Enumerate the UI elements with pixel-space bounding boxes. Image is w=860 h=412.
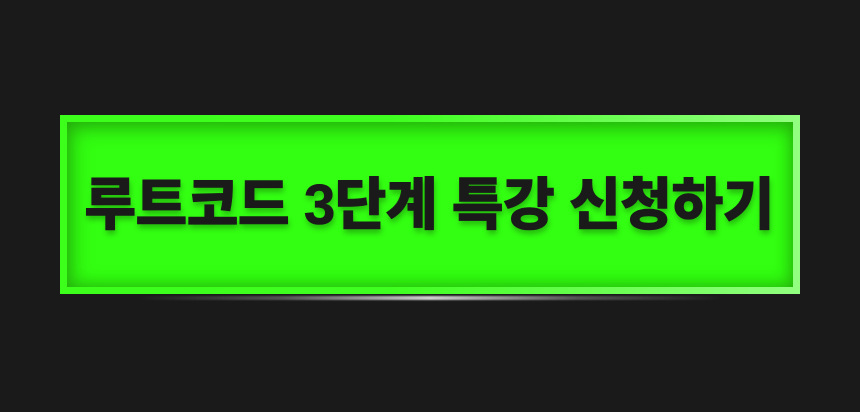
button inner fill xyxy=(67,122,793,287)
button panel xyxy=(60,115,800,294)
glow line under button xyxy=(135,296,725,300)
button label: 루트코드 3단계 특강 신청하기 xyxy=(84,173,774,236)
